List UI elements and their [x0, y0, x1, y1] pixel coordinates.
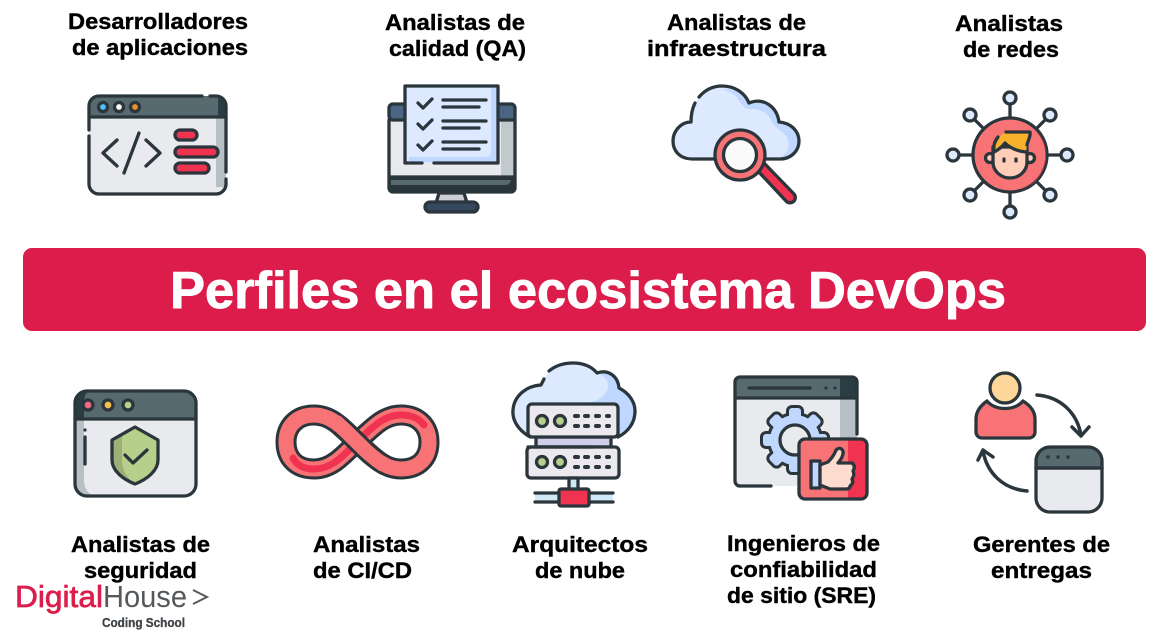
label: Gerentes de entregas: Gerentes de — [973, 532, 1110, 557]
label: Analistas de seguridad: Analistas de — [71, 532, 210, 557]
label: Analistas de calidad (QA) — [385, 10, 526, 61]
icon: person and window delivery cycle — [976, 373, 1102, 512]
label: Desarrolladores de aplicaciones: Desarrolladores — [68, 9, 248, 34]
label: Arquitectos de nube: Arquitectos — [512, 532, 648, 557]
label: Analistas de seguridad: seguridad — [84, 558, 197, 583]
title text: Perfiles en el ecosistema DevOps — [170, 262, 1006, 320]
label: Arquitectos de nube: de nube — [535, 558, 625, 583]
icon: monitor with checklist — [389, 86, 515, 212]
logo: Digital House Coding School — [15, 579, 207, 630]
label: Gerentes de entregas: entregas — [991, 558, 1092, 583]
label: Analistas de infraestructura: infraestructura — [647, 36, 827, 61]
label: Desarrolladores de aplicaciones — [68, 9, 248, 60]
label: Analistas de redes: Analistas — [955, 11, 1063, 36]
label: Arquitectos de nube — [512, 532, 648, 583]
label: Analistas de calidad (QA): Analistas de — [385, 10, 525, 35]
logo: Digital House Coding School: Digital — [15, 579, 103, 614]
label: Analistas de CI/CD: de CI/CD — [313, 558, 412, 583]
label: Ingenieros de confiabilidad de sitio (SRE): de sitio (SRE) — [727, 583, 876, 608]
icon: cloud with magnifier — [673, 86, 799, 203]
icon: network with person — [947, 92, 1073, 218]
icon: infinity loop — [286, 415, 429, 469]
label: Gerentes de entregas — [973, 532, 1110, 583]
label: Analistas de seguridad — [71, 532, 210, 583]
label: Ingenieros de confiabilidad de sitio (SRE): Ingenieros de — [727, 531, 880, 556]
arrow: window to person — [978, 450, 1027, 491]
title banner — [23, 248, 1146, 331]
label: Analistas de CI/CD: Analistas — [313, 532, 420, 557]
label: Analistas de calidad (QA): calidad (QA) — [389, 36, 526, 61]
label: Analistas de redes: de redes — [963, 37, 1059, 62]
label: Analistas de infraestructura: Analistas de — [667, 10, 806, 35]
logo: Digital House Coding School: Coding School — [102, 616, 185, 630]
label: Analistas de redes — [955, 11, 1063, 62]
icon: code window — [89, 96, 226, 194]
label: Ingenieros de confiabilidad de sitio (SRE): confiabilidad — [730, 557, 877, 582]
icon: security window with shield — [75, 391, 196, 496]
arrow: person to window — [1037, 395, 1089, 436]
label: Ingenieros de confiabilidad de sitio (SRE) — [727, 531, 880, 608]
label: Analistas de infraestructura — [647, 10, 827, 61]
icon: cloud servers — [513, 363, 635, 506]
label: Analistas de CI/CD — [313, 532, 420, 583]
label: Desarrolladores de aplicaciones: de aplicaciones — [72, 35, 248, 60]
icon: gear window with thumbs up — [735, 377, 867, 499]
logo: Digital House Coding School: House — [103, 579, 187, 614]
